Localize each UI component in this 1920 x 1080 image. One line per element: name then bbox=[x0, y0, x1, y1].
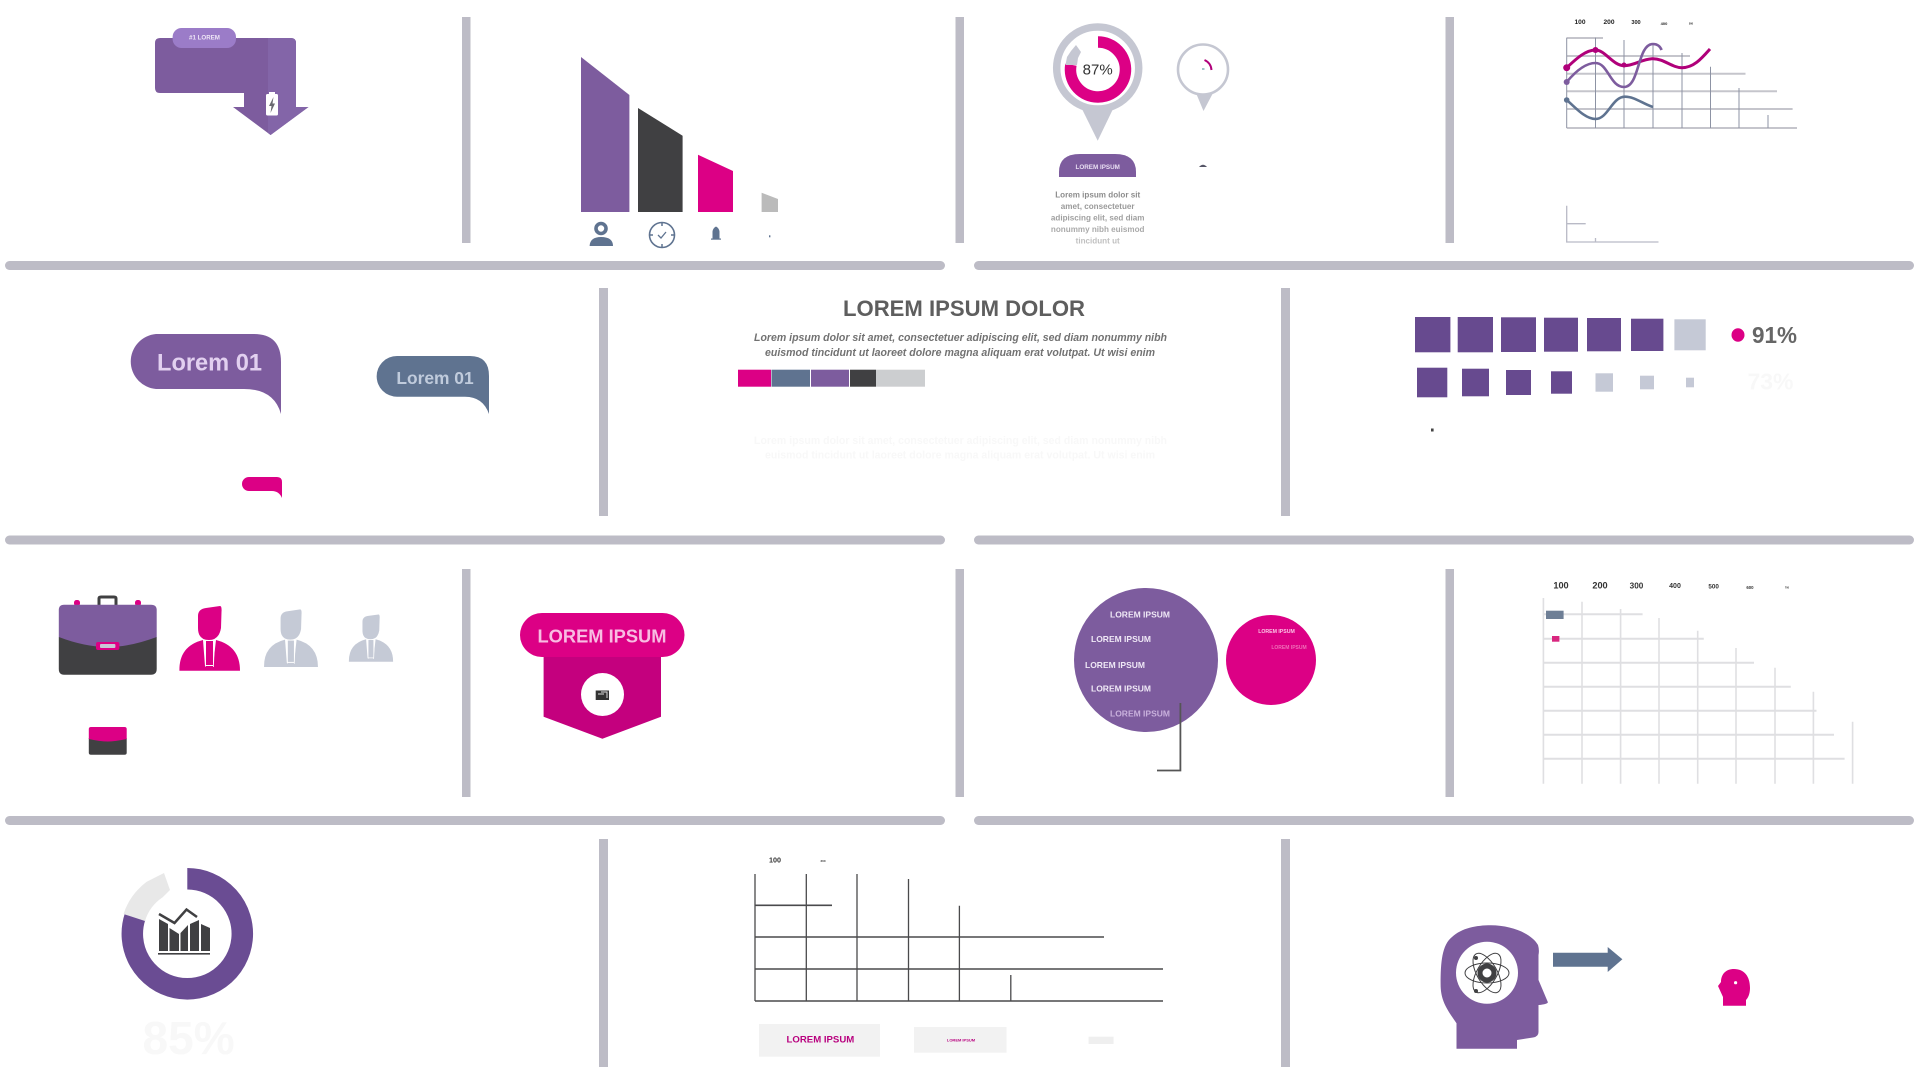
curve: magenta bbox=[1563, 47, 1710, 71]
curve: slate bbox=[1564, 97, 1653, 119]
axis labels: 400 bbox=[1669, 583, 1681, 590]
button 1: LOREM IPSUM bbox=[787, 1034, 854, 1046]
paragraph: adipiscing elit, sed diam bbox=[1051, 214, 1144, 222]
mini chart bbox=[1567, 206, 1658, 242]
icon: tiny dot bbox=[769, 235, 770, 237]
folder arrow shape bbox=[155, 38, 308, 135]
small pin bbox=[1178, 44, 1228, 111]
donut: purple bbox=[132, 879, 242, 989]
bubble: slate bbox=[377, 356, 489, 414]
tab label bbox=[173, 28, 236, 48]
tiny dot bbox=[1431, 428, 1434, 432]
subtitle: Lorem ipsum dolor sit amet, consectetuer adipiscing elit, sed diam nonummy nibh bbox=[754, 332, 1167, 344]
donut: gray remainder bbox=[124, 873, 170, 921]
value 85% faint: 85% bbox=[143, 1012, 235, 1064]
panel: descending bar chart bbox=[581, 57, 778, 248]
label pill bbox=[1059, 154, 1136, 177]
bar: purple bbox=[581, 57, 629, 212]
axis labels: 600 bbox=[1746, 585, 1754, 590]
row 2 squares bbox=[1417, 368, 1694, 397]
icon: businessman gray bbox=[264, 609, 318, 667]
heading: LOREM IPSUM DOLOR bbox=[843, 296, 1085, 321]
circle: purple: LOREM IPSUM bbox=[1085, 660, 1145, 670]
icon circle bbox=[581, 673, 624, 716]
circle: purple: LOREM IPSUM bbox=[1110, 609, 1170, 619]
bubble: magenta bbox=[242, 477, 282, 498]
button 2 bbox=[914, 1027, 1006, 1053]
colour swatches bbox=[738, 370, 925, 387]
faint text bbox=[754, 435, 1167, 462]
bracket line bbox=[1157, 703, 1180, 770]
axis labels: 100 bbox=[769, 856, 781, 864]
axis labels: 300 bbox=[1630, 582, 1644, 590]
legend dot bbox=[1732, 328, 1744, 342]
bubble: slate: Lorem 01 bbox=[396, 368, 474, 388]
icon: chart bbox=[158, 910, 210, 955]
panel: map pin gauges bbox=[1051, 27, 1228, 246]
circle: purple bbox=[1074, 588, 1218, 732]
axis labels: 200 bbox=[1592, 581, 1608, 591]
paragraph bbox=[1051, 190, 1145, 246]
bar: gray bbox=[762, 193, 778, 212]
bubble: purple bbox=[131, 334, 281, 414]
axis labels: 100 bbox=[1553, 581, 1569, 591]
icon: briefcase bbox=[59, 597, 157, 675]
large pin bbox=[1057, 27, 1139, 141]
panel: line chart bbox=[1563, 19, 1797, 242]
axis labels: 400 bbox=[1661, 21, 1668, 26]
icon: small magenta head bbox=[1718, 969, 1750, 1006]
row 1 squares bbox=[1415, 317, 1706, 352]
value 73% faint: 73% bbox=[1747, 369, 1794, 395]
bar: dark bbox=[638, 108, 683, 212]
icon: clock bbox=[650, 222, 674, 248]
panel: donut gauge bbox=[124, 873, 242, 1064]
circle: magenta: LOREM IPSUM bbox=[1258, 629, 1295, 635]
paragraph: amet, consectetuer bbox=[1061, 202, 1135, 211]
button 2: LOREM IPSUM bbox=[947, 1038, 976, 1042]
circle: purple: LOREM IPSUM bbox=[1091, 683, 1151, 693]
axis labels: 200 bbox=[1603, 19, 1615, 26]
panel: head with atom bbox=[1441, 925, 1750, 1049]
marker: magenta bbox=[1552, 636, 1559, 642]
subtitle: euismod tincidunt ut laoreet dolore magna aliquam erat volutpat. Ut wisi enim bbox=[765, 347, 1155, 359]
arrow lighter column bbox=[268, 38, 308, 135]
bubble: purple: Lorem 01 bbox=[157, 350, 262, 376]
grid bbox=[1567, 38, 1797, 128]
grid bbox=[1543, 598, 1853, 784]
label pill: LOREM IPSUM bbox=[1075, 164, 1120, 171]
paragraph: Lorem ipsum dolor sit bbox=[1055, 190, 1140, 200]
grid bbox=[755, 874, 1163, 1001]
axis labels bbox=[1574, 19, 1694, 26]
header pill: LOREM IPSUM bbox=[538, 626, 666, 646]
circle: magenta bbox=[1226, 615, 1316, 705]
icon: purple head bbox=[1441, 925, 1548, 1049]
panel: central title bbox=[738, 296, 1167, 462]
banner bbox=[544, 650, 661, 739]
axis labels: 200 bbox=[820, 859, 826, 863]
curve: purple bbox=[1564, 44, 1662, 87]
subtitle bbox=[754, 332, 1167, 359]
panel: ribbon badge bbox=[520, 613, 684, 739]
header pill bbox=[520, 613, 684, 657]
panel: light grid chart bbox=[1543, 581, 1853, 784]
faint text: Lorem ipsum dolor sit amet, consectetuer adipiscing elit, sed diam nonummy nibh bbox=[754, 435, 1167, 447]
panel: folder with down arrow bbox=[155, 28, 308, 135]
panel: briefcase and people bbox=[59, 597, 393, 755]
faint text: euismod tincidunt ut laoreet dolore magna aliquam erat volutpat. Ut wisi enim bbox=[765, 450, 1155, 462]
button 1 bbox=[759, 1024, 880, 1057]
bar: magenta bbox=[698, 155, 733, 212]
tab label: #1 LOREM bbox=[189, 34, 220, 42]
small pill bbox=[1199, 165, 1207, 167]
icon: small briefcase bbox=[89, 727, 127, 755]
icon: businessman small gray bbox=[349, 614, 393, 662]
paragraph: nonummy nibh euismod bbox=[1051, 225, 1145, 234]
icon: person bbox=[590, 224, 613, 246]
large pin: 87% bbox=[1083, 62, 1113, 78]
axis labels: 500 bbox=[1689, 22, 1694, 26]
circle: magenta: LOREM IPSUM bbox=[1271, 645, 1307, 651]
atom disc bbox=[1456, 942, 1518, 1004]
panel: square progress rows bbox=[1415, 317, 1797, 432]
axis labels: 700 bbox=[1785, 586, 1790, 590]
axis labels: 300 bbox=[1631, 20, 1641, 26]
axis labels bbox=[1553, 581, 1790, 591]
panel: dark grid chart bbox=[755, 856, 1163, 1057]
paragraph: tincidunt ut bbox=[1076, 236, 1120, 246]
icon: businessman magenta bbox=[179, 606, 240, 671]
circle: purple: LOREM IPSUM bbox=[1091, 634, 1151, 644]
marker: slate bbox=[1546, 611, 1564, 619]
button 3 bbox=[1089, 1037, 1114, 1044]
icon: bell bbox=[711, 226, 721, 240]
value 91%: 91% bbox=[1752, 322, 1797, 348]
panel: speech bubbles bbox=[131, 334, 489, 498]
axis labels: 100 bbox=[1574, 19, 1586, 26]
axis labels bbox=[769, 856, 826, 864]
axis labels: 500 bbox=[1708, 584, 1719, 590]
circle: purple: LOREM IPSUM bbox=[1110, 708, 1170, 718]
arrow bbox=[1553, 947, 1622, 972]
icon: battery bbox=[266, 92, 278, 116]
panel: circles bbox=[1074, 588, 1316, 770]
